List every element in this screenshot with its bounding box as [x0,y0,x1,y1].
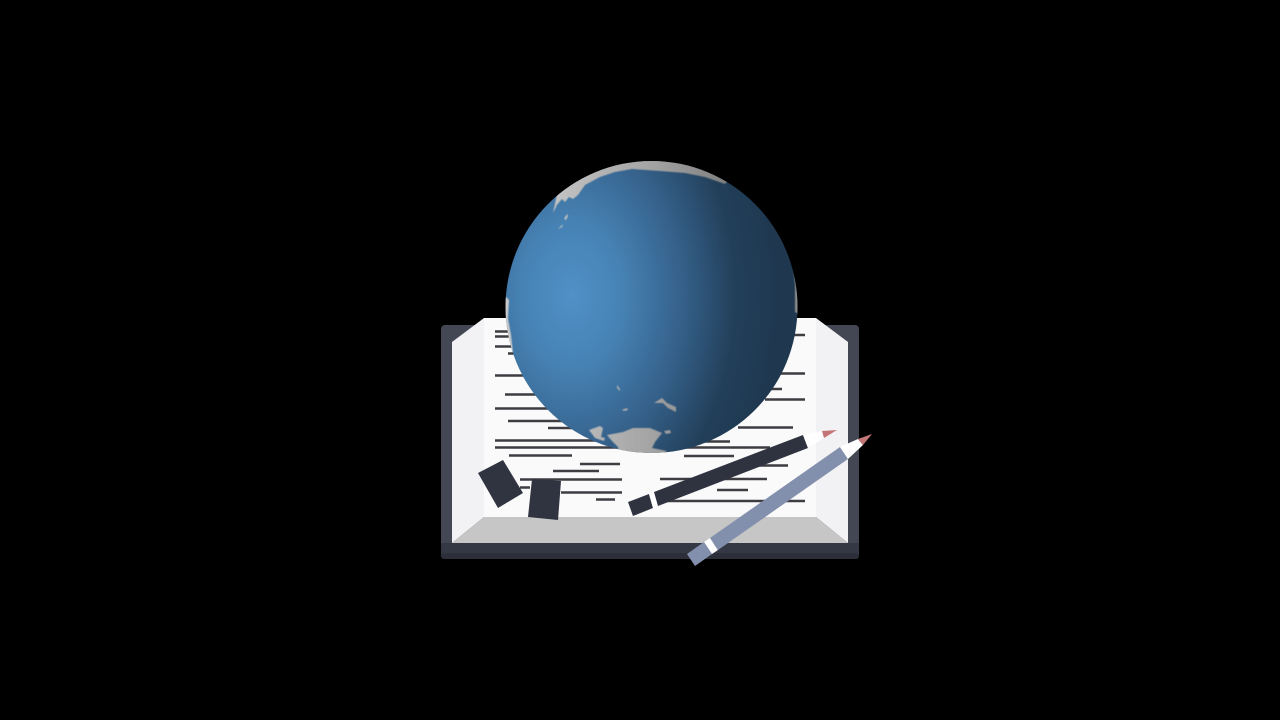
book page [484,318,816,518]
blue pencil [687,434,872,566]
lines of page text [495,332,805,501]
open book [441,318,859,559]
eraser block left [478,460,523,508]
illustration: globe over open book [441,161,872,566]
globe [500,150,800,456]
eraser block right [528,479,561,520]
left page edge [452,318,484,543]
right page edge [816,318,848,543]
continents [500,150,800,456]
globe sphere [506,161,798,453]
bottom page edge [452,517,848,543]
book cover [441,325,859,559]
dark pencil [628,430,837,516]
